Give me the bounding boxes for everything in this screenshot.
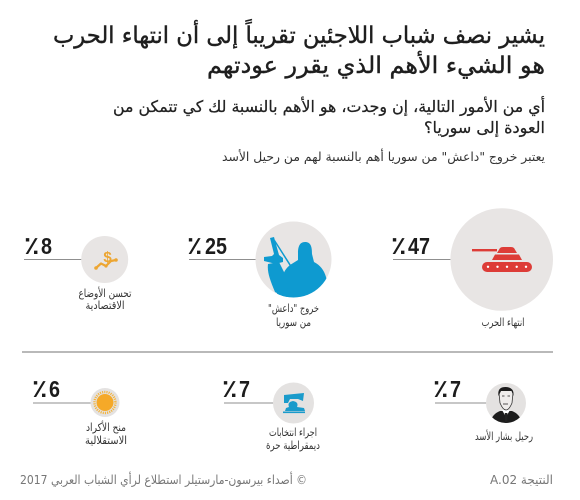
title: يشير نصف شباب اللاجئين تقريباً إلى أن انتهاء الحرب — [53, 19, 545, 49]
item: free elections 7%: ٪ — [222, 374, 237, 403]
question subheading — [113, 96, 545, 138]
item: free elections 7%: ديمقراطية حرة — [266, 439, 320, 452]
item: Kurdish independence 6%: 6 — [49, 376, 60, 402]
icon: tank — [472, 247, 532, 272]
item: Assad leaving 7%: ٪ — [433, 374, 448, 403]
item: end of war 47% — [391, 208, 553, 329]
item: ISIS leaving 25%: خروج "داعش" — [268, 302, 319, 315]
item: economy 8%: 8 — [41, 233, 52, 259]
item: ISIS leaving 25% — [187, 222, 332, 329]
item: Kurdish independence 6%: ٪ — [32, 374, 47, 403]
item: Kurdish independence 6%: منح الأكراد — [86, 420, 126, 434]
item: free elections 7% — [222, 374, 320, 452]
item: ISIS leaving 25%: من سوريا — [276, 316, 311, 329]
footer: source: © أصداء بيرسون-مارستيلر استطلاع لرأي الشباب العربي 2017 — [20, 471, 307, 488]
icon: economic growth: $ — [103, 249, 112, 266]
icon: sun — [94, 392, 116, 413]
title — [53, 19, 545, 79]
icon: portrait — [492, 387, 520, 423]
summary text: يعتبر خروج "داعش" من سوريا أهم بالنسبة لهم من رحيل الأسد — [222, 148, 546, 165]
item: Assad leaving 7% — [434, 381, 532, 442]
item: economy 8%: ٪ — [24, 231, 39, 260]
item: economy 8%: تحسن الأوضاع — [78, 286, 132, 300]
footer: finding number: النتيجة A.02 — [490, 472, 553, 487]
title: هو الشيء الأهم الذي يقرر عودتهم — [207, 51, 545, 79]
item: economy 8% — [24, 231, 132, 312]
item: Kurdish independence 6%: الاستقلالية — [85, 434, 127, 447]
icon: elections — [283, 393, 305, 413]
item: end of war 47%: 47 — [408, 233, 430, 259]
item: free elections 7%: 7 — [239, 376, 250, 402]
question subheading: أي من الأمور التالية، إن وجدت، هو الأهم بالنسبة لك كي تتمكن من — [113, 96, 545, 117]
item: ISIS leaving 25%: 25 — [205, 233, 227, 259]
item: Assad leaving 7%: رحيل بشار الأسد — [475, 429, 533, 443]
question subheading: العودة إلى سوريا؟ — [424, 118, 545, 138]
item: Kurdish independence 6% — [32, 374, 127, 447]
item: end of war 47%: انتهاء الحرب — [482, 316, 524, 329]
item: free elections 7%: اجراء انتخابات — [269, 426, 317, 439]
item: end of war 47%: ٪ — [391, 231, 406, 260]
icon: fighter silhouette — [264, 237, 326, 298]
item: ISIS leaving 25%: ٪ — [187, 231, 202, 260]
item: economy 8%: الاقتصادية — [86, 299, 124, 312]
item: Assad leaving 7%: 7 — [450, 376, 461, 402]
divider — [22, 351, 553, 353]
